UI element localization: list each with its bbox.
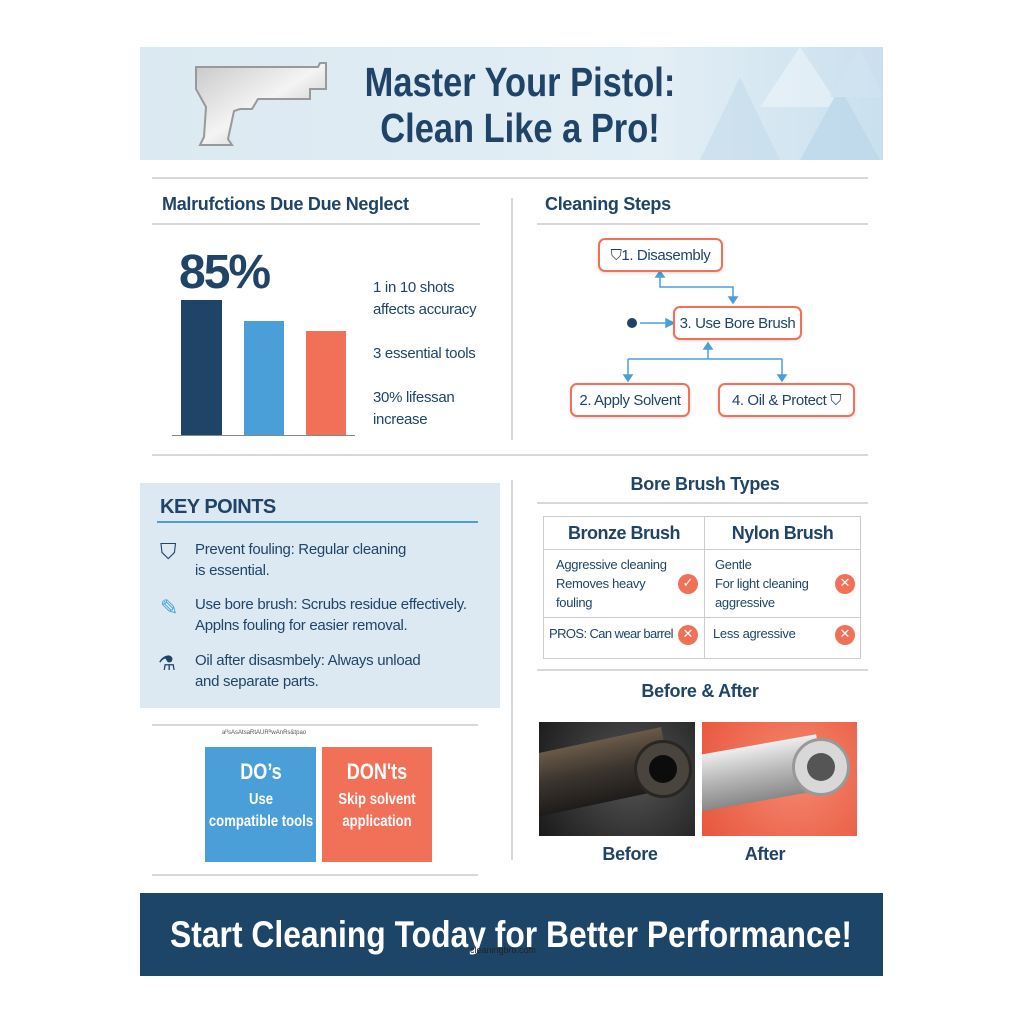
- step 4: [718, 383, 855, 417]
- stats text: 30% lifessan: [373, 389, 454, 406]
- bar chart: [172, 246, 355, 436]
- table: fouling: [556, 595, 592, 610]
- panel: key points: KEY POINTS: [160, 496, 276, 518]
- table: Gentle: [715, 557, 752, 572]
- step 1: ⛉1. Disasembly: [611, 246, 710, 264]
- panel: key points: Prevent fouling: Regular cleaning: [195, 541, 406, 558]
- table: For light cleaning: [715, 576, 809, 591]
- title: [365, 59, 675, 151]
- DONT box: application: [342, 813, 412, 830]
- flow diagram: [569, 238, 856, 419]
- DONT box: [322, 747, 432, 862]
- table: Less agressive: [713, 626, 796, 641]
- table: ✕: [840, 576, 850, 591]
- image: before barrel: [539, 722, 695, 836]
- table: Bronze Brush: [568, 523, 680, 543]
- image: after barrel: [702, 722, 857, 836]
- table: [543, 516, 861, 659]
- step 2: 2. Apply Solvent: [579, 392, 681, 408]
- text: aᴿsAsAtsaRtAURᴿwAnRs&tpaᴏ: [222, 730, 306, 736]
- decorative triangles: [700, 48, 880, 160]
- DONT box: Skip solvent: [338, 791, 416, 808]
- step 2: [570, 383, 690, 417]
- heading: bore brush types: Bore Brush Types: [631, 474, 779, 494]
- DO box: [205, 747, 316, 862]
- table: PROS: Can wear barrel: [549, 626, 673, 641]
- step 4: 4. Oil & Protect ⛉: [732, 392, 841, 408]
- panel: key points: is essential.: [195, 562, 269, 579]
- panel: key points: [140, 483, 500, 708]
- heading: cleaning steps: Cleaning Steps: [545, 194, 671, 214]
- title: Master Your Pistol:: [365, 59, 675, 105]
- icon: brush: ✎: [160, 595, 178, 620]
- table: Aggressive cleaning: [556, 557, 667, 572]
- stats text: increase: [373, 411, 427, 428]
- icon: oil: ⚗: [158, 653, 176, 675]
- title: Clean Like a Pro!: [380, 105, 660, 151]
- icon: pistol: [195, 62, 327, 146]
- stats text: 3 essential tools: [373, 345, 475, 362]
- table: aggressive: [715, 595, 775, 610]
- labels: Before: [602, 844, 658, 864]
- DO box: DO’s: [240, 759, 281, 784]
- bar chart: 85%: [179, 246, 269, 299]
- text: After: [745, 844, 785, 864]
- step 3: [673, 306, 802, 340]
- header banner: [140, 47, 883, 160]
- stats text: [373, 279, 477, 428]
- table: Removes heavy: [556, 576, 645, 591]
- step 3: 3. Use Bore Brush: [680, 314, 795, 332]
- table: Nylon Brush: [732, 523, 833, 543]
- table: ✕: [840, 627, 850, 642]
- panel: key points: Applns fouling for easier removal.: [195, 617, 407, 634]
- stats text: 1 in 10 shots: [373, 279, 454, 296]
- panel: key points: Use bore brush: Scrubs residue effectively.: [195, 596, 467, 613]
- footer banner: Start Cleaning Today for Better Performance!: [170, 914, 852, 955]
- step 1: [598, 238, 723, 272]
- heading: before & after: Before & After: [641, 681, 759, 701]
- DONT box: DON'ts: [347, 759, 407, 784]
- DO box: Use: [248, 791, 273, 808]
- heading: malfunctions: Malrufctions Due Due Neglect: [162, 194, 409, 214]
- icon: shield: ⛉: [160, 539, 177, 564]
- footer banner: cleaningbro.com: [470, 945, 536, 955]
- table: ✕: [683, 627, 693, 642]
- stats text: affects accuracy: [373, 301, 476, 318]
- footer banner: [140, 893, 883, 976]
- table: ✓: [683, 576, 693, 591]
- panel: key points: Oil after disasmbely: Always unload: [195, 652, 420, 669]
- panel: key points: and separate parts.: [195, 673, 319, 690]
- DO box: compatible tools: [208, 813, 313, 830]
